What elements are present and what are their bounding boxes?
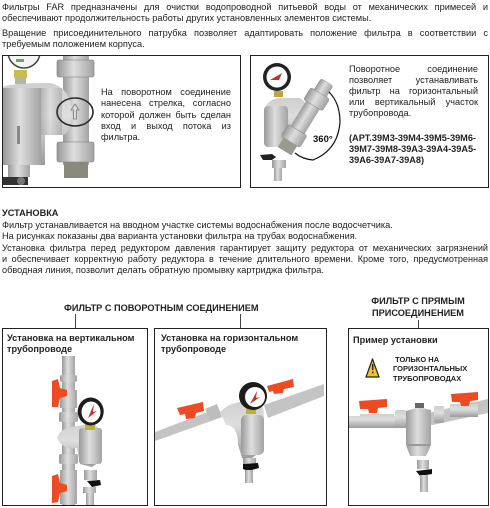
text block: rotary explanation: трубопровода. [349,108,411,118]
text block: installation: На рисунках показаны два варианта установки фильтра на трубах водоснабжения. [2,231,357,241]
label: vertical installation: Установка на вертикальном [7,333,134,343]
text block: rotary explanation: или вертикальный участок [349,97,478,107]
text block: arrow explanation: которой должен быть сделан [101,110,231,120]
text block: arrow explanation: нанесена стрелка, согласно [101,98,231,108]
text block: intro: Фильтры FAR предназначены для очистки водопроводной питьевой воды от механических примесей и [2,2,488,12]
text block: intro: Вращение присоединительного патрубка позволяет адаптировать положение фильтра в соответствии с [2,28,488,38]
warning text: ТРУБОПРОВОДАХ [393,374,461,383]
text block: arrow explanation: На поворотном соединение [101,87,231,97]
text block: arrow explanation [101,87,231,142]
illustration: filter with 360 rotation [260,63,340,181]
warning text: ТОЛЬКО НА [395,355,439,364]
panel: example installation [348,328,489,506]
text block: rotary explanation: Поворотное соединение [349,64,478,74]
text block: arrow explanation: фильтра. [101,132,140,142]
warning text: ГОРИЗОНТАЛЬНЫХ [393,364,467,373]
illustration: filter closeup [3,56,94,185]
text block: rotary explanation: 39М7-39М8-39А3-39А4-39А5- [349,144,476,154]
label: horizontal installation: трубопроводе [161,344,226,354]
text block: intro: требуемым положением корпуса. [2,39,145,49]
text block: intro [2,2,488,49]
panel: rotary connection 360 [250,55,489,188]
label: example: Пример установки [353,335,438,345]
text block: rotary explanation: 39А6-39А7-39А8) [349,155,424,165]
panel: vertical installation [2,328,148,506]
text block: rotary explanation: (АРТ.39М3-39М4-39М5-39М6- [349,133,476,143]
text block: rotary explanation: фильтр на горизонтальный [349,86,478,96]
text block: installation [2,220,488,275]
label: vertical installation [7,333,134,354]
text block: arrow explanation: вход и выход потока из [101,121,231,131]
heading: straight filter: ПРИСОЕДИНЕНИЕМ [372,308,464,318]
warning text [393,355,468,383]
text block: installation: Фильтр устанавливается на вводном участке системы водоснабжения после водосчетчика. [2,220,393,230]
text block: rotary explanation: позволяет устанавливать [349,75,478,85]
label: vertical installation: трубопроводе [7,344,72,354]
text block: installation: обводная линия, позволит делать обратную промывку картриджа фильтра. [2,265,324,275]
heading: rotary filter: ФИЛЬТР С ПОВОРОТНЫМ СОЕДИНЕНИЕМ [64,303,259,313]
label: horizontal installation: Установка на горизонтальном [161,333,298,343]
heading: straight filter [371,296,465,318]
label: horizontal installation [161,333,298,354]
label: 360 degrees: 360° [313,134,333,145]
panel: arrow on rotary connection [2,55,241,188]
icon: warning [366,359,379,377]
text block: rotary explanation [349,64,478,165]
heading: installation: УСТАНОВКА [2,208,58,218]
illustration: vertical installation [52,356,104,505]
text block: installation: Установка фильтра перед редуктором давления гарантирует защиту редуктора от механических загрязнений [2,242,488,252]
illustration: example installation [349,359,488,492]
panel: horizontal installation [154,328,327,506]
text block: installation: и обеспечивает корректную работу редуктора в течение длительного времени. Кроме того, предусмотренная [2,254,488,264]
heading: straight filter: ФИЛЬТР С ПРЯМЫМ [371,296,465,306]
illustration: horizontal installation [155,379,324,483]
text block: intro: обеспечивают продолжительность работы других установленных элементов системы. [2,13,371,23]
